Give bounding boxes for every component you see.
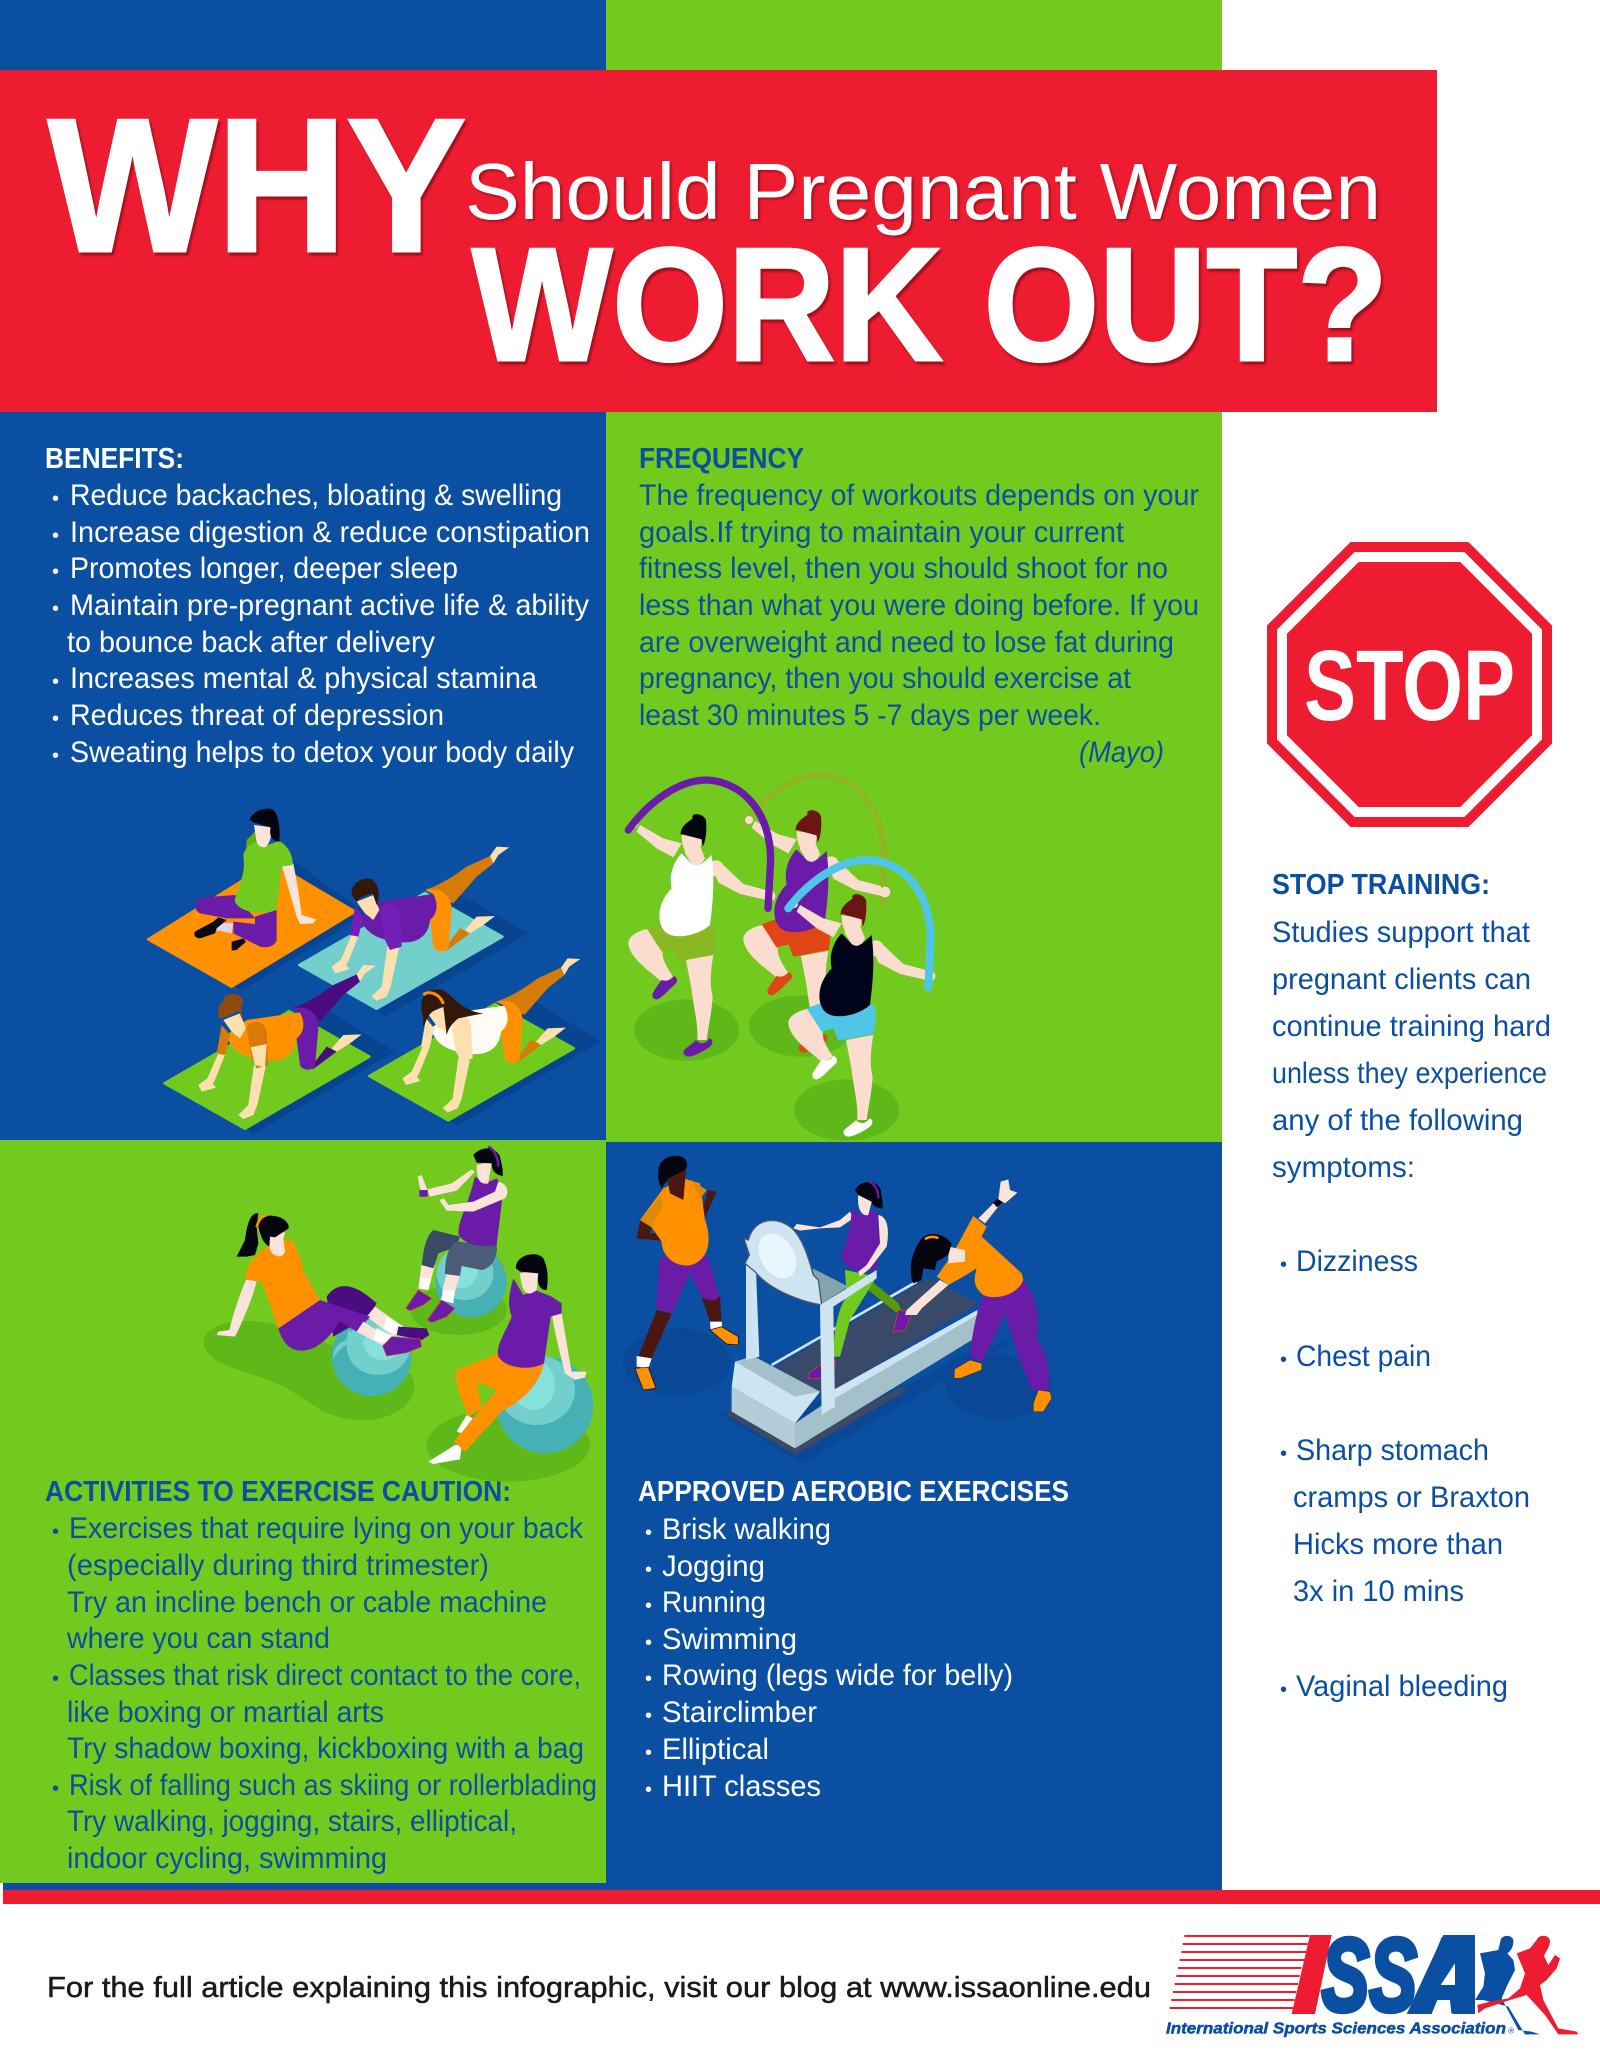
benefits list: Increases mental & physical stamina [70, 662, 537, 695]
woman doing crunch on ball [217, 1213, 429, 1356]
caution list: • [52, 1778, 59, 1800]
benefits list: • [52, 745, 59, 767]
mat: green right [369, 1004, 574, 1120]
woman stretching, right [905, 1179, 1052, 1412]
frequency paragraph [639, 479, 1199, 769]
panel: caution [0, 1140, 606, 1890]
caution list: where you can stand [66, 1622, 330, 1655]
title: Should Pregnant Women: Should Pregnant Women [465, 147, 1381, 236]
frequency paragraph: The frequency of workouts depends on your [639, 479, 1199, 512]
caution list: indoor cycling, swimming [67, 1842, 387, 1875]
benefits list: • [52, 708, 59, 730]
caution list: Try walking, jogging, stairs, elliptical, [67, 1805, 517, 1838]
aerobic list: • [645, 1632, 652, 1654]
stop training paragraph: continue training hard [1272, 1010, 1551, 1043]
caution list: Risk of falling such as skiing or rollerblading [69, 1769, 597, 1802]
treadmill [727, 1220, 978, 1455]
panel: stop training [1272, 869, 1551, 1703]
stop training paragraph [1272, 916, 1551, 1184]
symptoms list: 3x in 10 mins [1293, 1575, 1464, 1608]
benefits list: • [52, 561, 59, 583]
ISSA logo [1166, 1917, 1578, 2038]
logo letter A counter [1441, 1963, 1455, 1985]
woman with hands on hips, left [635, 1156, 738, 1390]
footer red bar [3, 1890, 1600, 1904]
aerobic list: • [645, 1595, 652, 1617]
stop training paragraph: any of the following [1272, 1104, 1523, 1137]
logo letter A block [1407, 1935, 1475, 2014]
logo tagline: International Sports Sciences Association [1166, 2021, 1506, 2038]
frequency paragraph: fitness level, then you should shoot for no [639, 552, 1168, 585]
woman sitting on ball, purple tank [406, 1147, 507, 1323]
benefits list: • [52, 488, 59, 510]
benefits list: • [52, 598, 59, 620]
aerobic list: Elliptical [662, 1733, 769, 1766]
benefits list: to bounce back after delivery [67, 626, 435, 659]
illustration: women with resistance hoops [628, 775, 935, 1141]
stop word: STOP [1304, 630, 1515, 742]
frequency paragraph: goals.If trying to maintain your current [639, 516, 1125, 549]
hoop: olive, behind [743, 775, 884, 903]
symptoms list: Hicks more than [1293, 1528, 1503, 1561]
woman walking on treadmill [793, 1182, 912, 1415]
symptoms list: • [1280, 1254, 1287, 1276]
aerobic list [645, 1513, 1013, 1803]
ball three [497, 1355, 593, 1453]
benefits list: Reduce backaches, bloating & swelling [70, 479, 562, 512]
panel: aerobic exercises [606, 1142, 1222, 1890]
frequency paragraph: pregnancy, then you should exercise at [639, 662, 1132, 695]
symptoms list: Dizziness [1296, 1245, 1418, 1278]
aerobic list: • [645, 1742, 652, 1764]
stop training paragraph: Studies support that [1272, 916, 1531, 949]
aerobic list: Stairclimber [662, 1696, 817, 1729]
woman: black top, front [788, 894, 935, 1141]
headband: orange [423, 993, 443, 1004]
benefits list: Increase digestion & reduce constipation [70, 516, 590, 549]
woman sitting on ball, orange leggings [428, 1254, 587, 1464]
benefits list: Promotes longer, deeper sleep [70, 552, 458, 585]
aerobic list: Brisk walking [662, 1513, 831, 1546]
caution list: Classes that risk direct contact to the core, [69, 1659, 581, 1692]
heading: caution: ACTIVITIES TO EXERCISE CAUTION: [45, 1476, 511, 1508]
aerobic list: • [645, 1705, 652, 1727]
symptoms list: cramps or Braxton [1293, 1481, 1530, 1514]
shadow: ball one [203, 1321, 414, 1420]
logo runner: blue [1475, 1936, 1540, 2034]
aerobic list: Running [662, 1586, 766, 1619]
caution list: like boxing or martial arts [67, 1696, 384, 1729]
benefits list: Maintain pre-pregnant active life & ability [70, 589, 589, 622]
heading: aerobic exercises: APPROVED AEROBIC EXERCISES [638, 1476, 1069, 1508]
caution list: • [52, 1521, 59, 1543]
registered mark: ® [1508, 2027, 1514, 2036]
hoop: light blue [788, 860, 931, 987]
aerobic list: • [645, 1559, 652, 1581]
stop training paragraph: unless they experience [1272, 1057, 1547, 1090]
ball one [332, 1316, 412, 1396]
mat: orange [148, 862, 355, 987]
caution list [52, 1512, 597, 1875]
benefits list: Sweating helps to detox your body daily [70, 736, 574, 769]
caution list: Try an incline bench or cable machine [67, 1586, 547, 1619]
frequency paragraph: (Mayo) [1079, 736, 1164, 769]
aerobic list: Rowing (legs wide for belly) [662, 1659, 1013, 1692]
benefits list: • [52, 671, 59, 693]
woman on all fours, orange top [198, 965, 376, 1119]
logo letters: I [1293, 2008, 1294, 2012]
heading: benefits: BENEFITS: [45, 443, 184, 475]
panel: frequency [606, 412, 1222, 1142]
illustration: treadmill and women [623, 1156, 1052, 1463]
footer text: For the full article explaining this infographic, visit our blog at www.issaonline.edu [47, 1972, 1151, 2004]
background: top-right green panel [606, 0, 1222, 70]
logo letters: SSA [1322, 1917, 1468, 2033]
hair: brown bun [218, 994, 243, 1020]
background: top-left blue panel [0, 0, 606, 70]
title: WHY: WHY [48, 80, 466, 292]
symptoms list: Vaginal bleeding [1296, 1670, 1508, 1703]
shadow: ball two [410, 1285, 507, 1335]
logo runner: red [1477, 1936, 1578, 2034]
woman on all fours, purple top [332, 847, 509, 1001]
aerobic list: HIIT classes [662, 1770, 821, 1803]
frequency paragraph: less than what you were doing before. If you [639, 589, 1199, 622]
symptoms list: • [1280, 1349, 1287, 1371]
logo speed stripes [1170, 1935, 1332, 2014]
benefits list: Reduces threat of depression [70, 699, 444, 732]
woman: white top, left [628, 814, 775, 1061]
title banner [0, 70, 1437, 412]
panel: stop sign [1267, 542, 1552, 827]
shadow: ball three [427, 1408, 590, 1482]
mat: green left [165, 1011, 369, 1129]
heading: frequency: FREQUENCY [639, 443, 804, 475]
illustration: women on yoga mats [148, 809, 600, 1134]
frequency paragraph: are overweight and need to lose fat during [639, 626, 1174, 659]
caution list: (especially during third trimester) [67, 1549, 489, 1582]
symptoms list: Sharp stomach [1296, 1434, 1489, 1467]
symptoms list: • [1280, 1679, 1287, 1701]
frequency paragraph: least 30 minutes 5 -7 days per week. [639, 699, 1101, 732]
caution list: Exercises that require lying on your back [69, 1512, 584, 1545]
symptoms list [1280, 1245, 1530, 1703]
near arm: skin over long sleeve [251, 1044, 267, 1067]
aerobic list: • [645, 1779, 652, 1801]
hoop: purple [628, 780, 771, 908]
aerobic list: Swimming [662, 1623, 797, 1656]
stop training paragraph: symptoms: [1272, 1151, 1415, 1184]
stop training paragraph: pregnant clients can [1272, 963, 1531, 996]
title: WORK OUT?: WORK OUT? [472, 215, 1388, 395]
woman on all fours, white top [403, 958, 580, 1112]
ball two [435, 1246, 507, 1317]
aerobic list: • [645, 1668, 652, 1690]
heading: stop training: STOP TRAINING: [1272, 869, 1490, 901]
hair: short brown [352, 879, 379, 905]
panel: benefits [0, 412, 606, 1140]
mat: teal [299, 893, 502, 1009]
aerobic list: • [645, 1522, 652, 1544]
illustration: women on exercise balls [203, 1147, 593, 1482]
woman seated on mat [194, 809, 316, 951]
symptoms list: Chest pain [1296, 1340, 1431, 1373]
aerobic list: Jogging [662, 1550, 765, 1583]
caution list: Try shadow boxing, kickboxing with a bag [67, 1732, 584, 1765]
floor shadows [623, 1328, 1052, 1463]
benefits list: • [52, 525, 59, 547]
caution list: • [52, 1668, 59, 1690]
symptoms list: • [1280, 1443, 1287, 1465]
woman: purple top, middle [743, 810, 890, 1057]
hair: long with orange band [421, 989, 483, 1035]
benefits list [52, 479, 590, 769]
